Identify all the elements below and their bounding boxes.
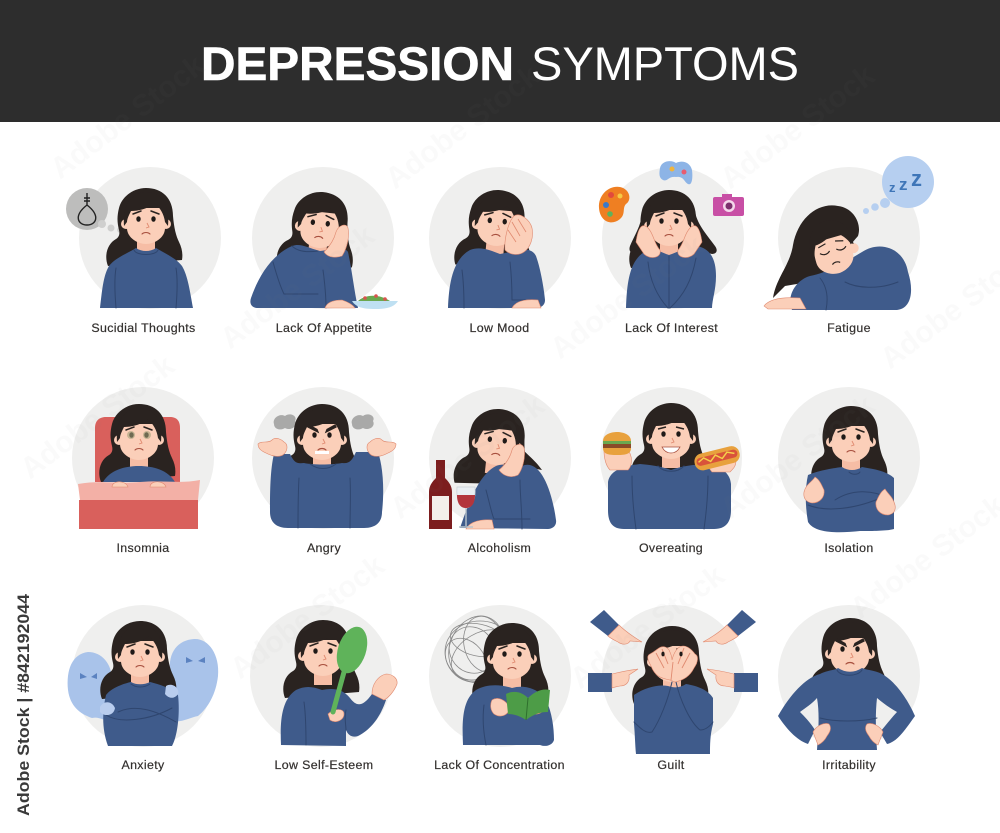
icon: green book [506,689,550,720]
icon: plate of food [352,294,398,309]
panel: lack of interest [599,161,744,335]
icon: pointing hand lower left [588,669,638,692]
stock watermark text [14,49,1000,696]
icon: pointing hand top right [703,610,756,644]
title: DEPRESSION [201,37,514,90]
label: Angry [307,541,342,555]
stock watermark text: Adobe Stock [384,389,551,526]
figure [100,621,179,746]
figure [804,406,895,532]
icon: thought bubble with noose [66,188,123,233]
label: Low Self-Esteem [275,758,373,772]
icon: wine bottle [429,460,452,529]
icon: burger [603,432,631,455]
label: Low Mood [470,321,529,335]
label: Lack Of Interest [625,321,718,335]
stock id vertical text: Adobe Stock | #842192044 [14,593,33,816]
label: Guilt [657,758,685,772]
label: Lack Of Concentration [434,758,565,772]
icon: sleep bubble: z [889,180,896,195]
panel: insomnia [72,387,214,555]
figure [604,403,736,529]
stock watermark text: Adobe Stock [44,49,211,186]
icon: hot dog [693,444,741,472]
panel: suicidal thoughts [66,167,221,335]
icon: bed and blanket [78,480,200,529]
figure [764,205,911,310]
panel: isolation [778,387,920,555]
stock watermark text: Adobe Stock [214,219,381,356]
figure [453,405,556,529]
label: Alcoholism [468,541,531,555]
figure [626,190,717,308]
panel: guilt [588,605,758,772]
panel: alcoholism [429,387,571,555]
panel: irritability [778,605,920,772]
figure [632,626,713,754]
stock watermark text: Adobe Stock [714,59,881,196]
title: SYMPTOMS [531,37,799,90]
figure [258,404,396,528]
icon: hand mirror [331,623,373,712]
stock watermark text: Adobe Stock [14,349,181,486]
panel: low mood [429,167,571,335]
icon: headboard [95,417,180,482]
stock watermark text: Adobe Stock [564,559,731,696]
icon: sleep bubble: z [899,175,908,194]
icon: game controller [659,161,692,184]
panel: fatigue [764,156,934,335]
stock watermark text: Adobe Stock [714,389,881,526]
panel: lack of concentration [429,605,571,772]
icon: steam clouds [274,414,374,429]
label: Overeating [639,541,703,555]
label: Fatigue [827,321,871,335]
title [201,37,799,90]
stock watermark text: Adobe Stock [379,59,546,196]
icon: wine glass [457,487,475,527]
panel: low self-esteem [250,605,397,772]
icon: tangled scribble [437,607,522,691]
panel: anxiety [68,605,218,772]
label: Lack Of Appetite [276,321,372,335]
panel: overeating [600,387,742,555]
label: Sucidial Thoughts [91,321,196,335]
label: Insomnia [116,541,170,555]
header band [0,0,1000,122]
label: Isolation [824,541,874,555]
figure [281,620,397,746]
figure [100,188,193,308]
icon: paint palette [599,187,629,222]
label: Anxiety [121,758,165,772]
icon: ghost left [68,652,112,720]
icon: sleep bubble: z [911,166,922,191]
figure [250,188,360,308]
icon: camera [713,194,744,216]
icon: pointing hand top left [590,610,642,644]
icon: ghost right [170,639,218,721]
panel: lack of appetite [250,167,398,335]
figure [99,404,175,482]
stock watermark text: Adobe Stock [224,549,391,686]
icon: sleep bubble [863,156,934,214]
icon: pointing hand lower right [707,669,758,692]
label: Irritability [822,758,876,772]
figure [463,623,554,746]
figure [778,618,915,750]
figure [448,187,545,308]
stock watermark text: Adobe Stock [544,229,711,366]
panel: angry [252,387,396,555]
